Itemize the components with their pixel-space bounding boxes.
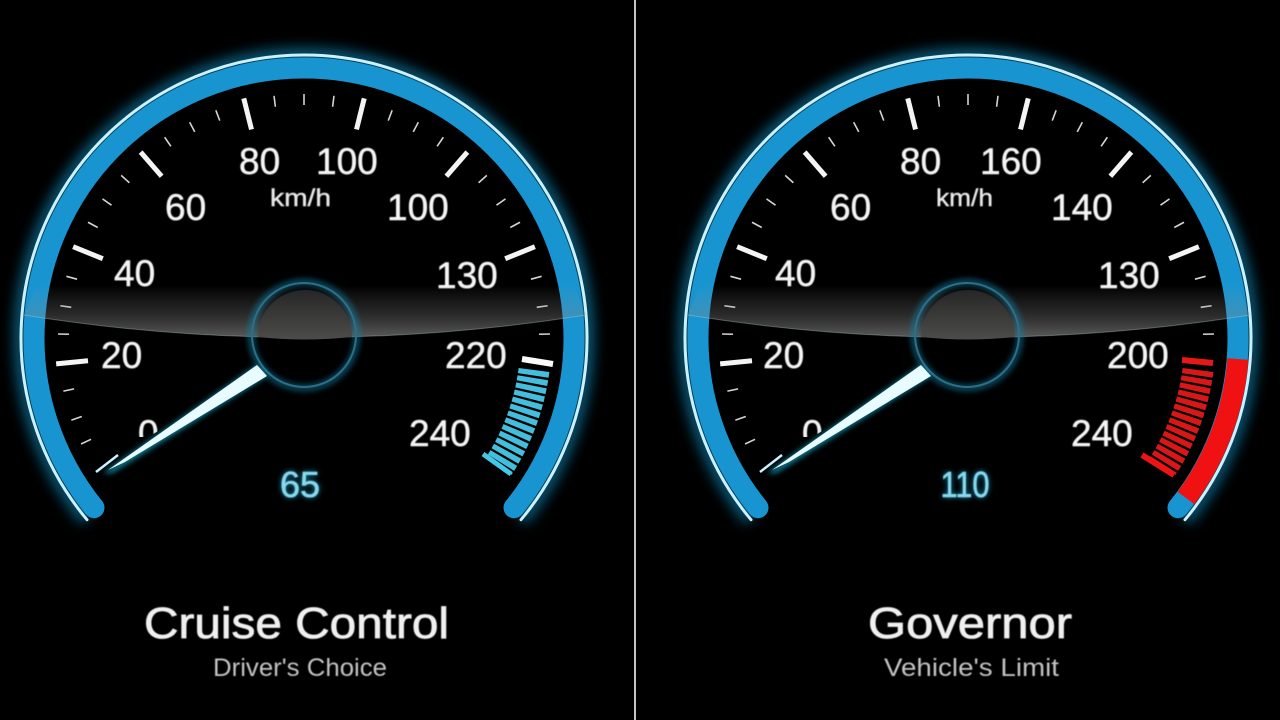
speed scale labels: 20 — [763, 335, 804, 376]
high speed segment scale: blue — [483, 359, 553, 474]
speed scale labels: 140 — [1051, 187, 1113, 228]
speed scale labels: 0 — [802, 413, 823, 454]
panel: governor gauge — [685, 55, 1251, 520]
speed scale labels: 130 — [436, 255, 498, 296]
speed scale labels — [763, 141, 1169, 470]
subtitle: driver's choice: Driver's Choice — [213, 654, 387, 682]
subtitle: vehicle's limit: Vehicle's Limit — [884, 654, 1059, 682]
speed readout: 110 — [940, 464, 990, 505]
tick marks — [720, 94, 1214, 444]
needle — [96, 365, 267, 473]
speed scale labels: 40 — [114, 253, 155, 294]
glass reflection band — [688, 282, 1250, 338]
speed readout: 65 — [280, 464, 320, 505]
speed readout: 110 — [940, 464, 990, 505]
speed scale labels: 200 — [1107, 335, 1169, 376]
speed scale labels: 20 — [101, 335, 142, 376]
speed scale labels: 40 — [775, 253, 816, 294]
speed scale labels: 240 — [409, 413, 471, 454]
high speed segment scale: red — [1142, 360, 1213, 475]
speed scale labels: 80 — [900, 141, 941, 182]
needle — [760, 365, 931, 473]
speed scale labels: 0 — [138, 413, 159, 454]
outer blue and red ring — [685, 55, 1251, 520]
speed scale labels: 80 — [239, 141, 280, 182]
divider line — [634, 0, 636, 720]
speed scale labels — [101, 141, 507, 470]
unit label: km/h — [936, 185, 993, 212]
speed scale labels: 60 — [830, 187, 871, 228]
speed readout: 65 — [280, 464, 320, 505]
speed scale labels: 100 — [387, 187, 449, 228]
speed scale labels: 130 — [1098, 255, 1160, 296]
speed scale labels: 60 — [165, 187, 206, 228]
unit label: km/h — [270, 185, 331, 212]
outer blue ring — [21, 55, 587, 520]
glass reflection band — [24, 282, 586, 338]
center hub — [914, 282, 1020, 388]
speed scale labels: 220 — [445, 335, 507, 376]
tick marks — [56, 94, 550, 444]
title: cruise control: Cruise Control — [144, 599, 449, 648]
speed scale labels: 100 — [316, 141, 378, 182]
title: governor: Governor — [868, 599, 1072, 648]
speed scale labels: 240 — [1071, 413, 1133, 454]
panel: cruise control gauge — [21, 55, 587, 520]
speed scale labels: 160 — [980, 141, 1042, 182]
center hub — [251, 282, 357, 388]
